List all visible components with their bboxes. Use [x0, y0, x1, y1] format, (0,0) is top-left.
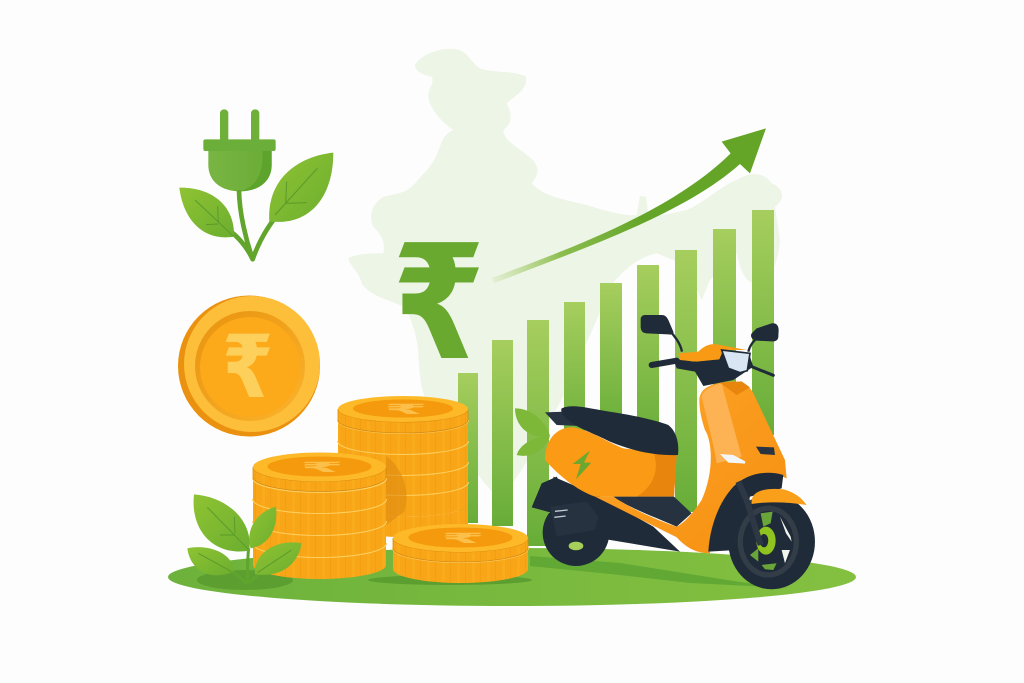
- front fender: [752, 489, 807, 505]
- rear body panel: [545, 427, 677, 497]
- headlight strip: [720, 454, 745, 464]
- rupee symbol on coin: ₹: [222, 317, 273, 419]
- front body and floor: [595, 381, 787, 553]
- left leaf: [179, 188, 234, 237]
- icon: plug with leaves: [179, 109, 333, 259]
- front fork: [738, 482, 761, 545]
- plant at base of coins: [187, 494, 302, 583]
- small leaves behind scooter: [515, 408, 550, 456]
- rupee symbol large green: ₹: [392, 210, 485, 396]
- footboard: [613, 497, 692, 527]
- electric scooter: [515, 315, 815, 589]
- bar chart: rising green bars: [458, 210, 774, 546]
- underbody dark: [553, 477, 680, 552]
- rupee mark on front left stack: ₹: [300, 459, 344, 475]
- icon: gold rupee coin: [178, 296, 320, 436]
- coin stack: rear: [338, 396, 468, 537]
- plug body: [203, 139, 276, 191]
- rear wheel: [543, 499, 609, 566]
- front cowl: [678, 344, 747, 362]
- low left leaf: [187, 547, 233, 575]
- growth arrow: [492, 128, 766, 283]
- coin stack: front left: [253, 452, 386, 579]
- upper right leaf: [249, 507, 276, 548]
- instrument display: [722, 350, 750, 373]
- lightning bolt: [573, 451, 591, 479]
- large leaf: [194, 494, 250, 551]
- rear motor housing: [550, 502, 598, 537]
- left mirror: [641, 315, 682, 352]
- seat: [561, 406, 678, 455]
- map of India watermark: [348, 49, 782, 500]
- ground ellipse: [168, 548, 856, 606]
- coin stack: front right: [393, 524, 528, 583]
- right leaf: [269, 153, 333, 222]
- plant stems: [227, 190, 282, 259]
- handlebars and neck: [652, 350, 773, 386]
- right mirror: [748, 323, 779, 352]
- front wheel: [728, 494, 815, 589]
- plug prongs: [220, 109, 259, 143]
- rear mudguard: [532, 477, 570, 513]
- rupee mark on front right stack: ₹: [441, 530, 485, 546]
- rupee mark on rear stack: ₹: [384, 401, 428, 417]
- grille: [756, 447, 775, 455]
- wheel arch: [708, 473, 783, 552]
- low right leaf: [255, 542, 302, 575]
- rear rack: [545, 412, 580, 426]
